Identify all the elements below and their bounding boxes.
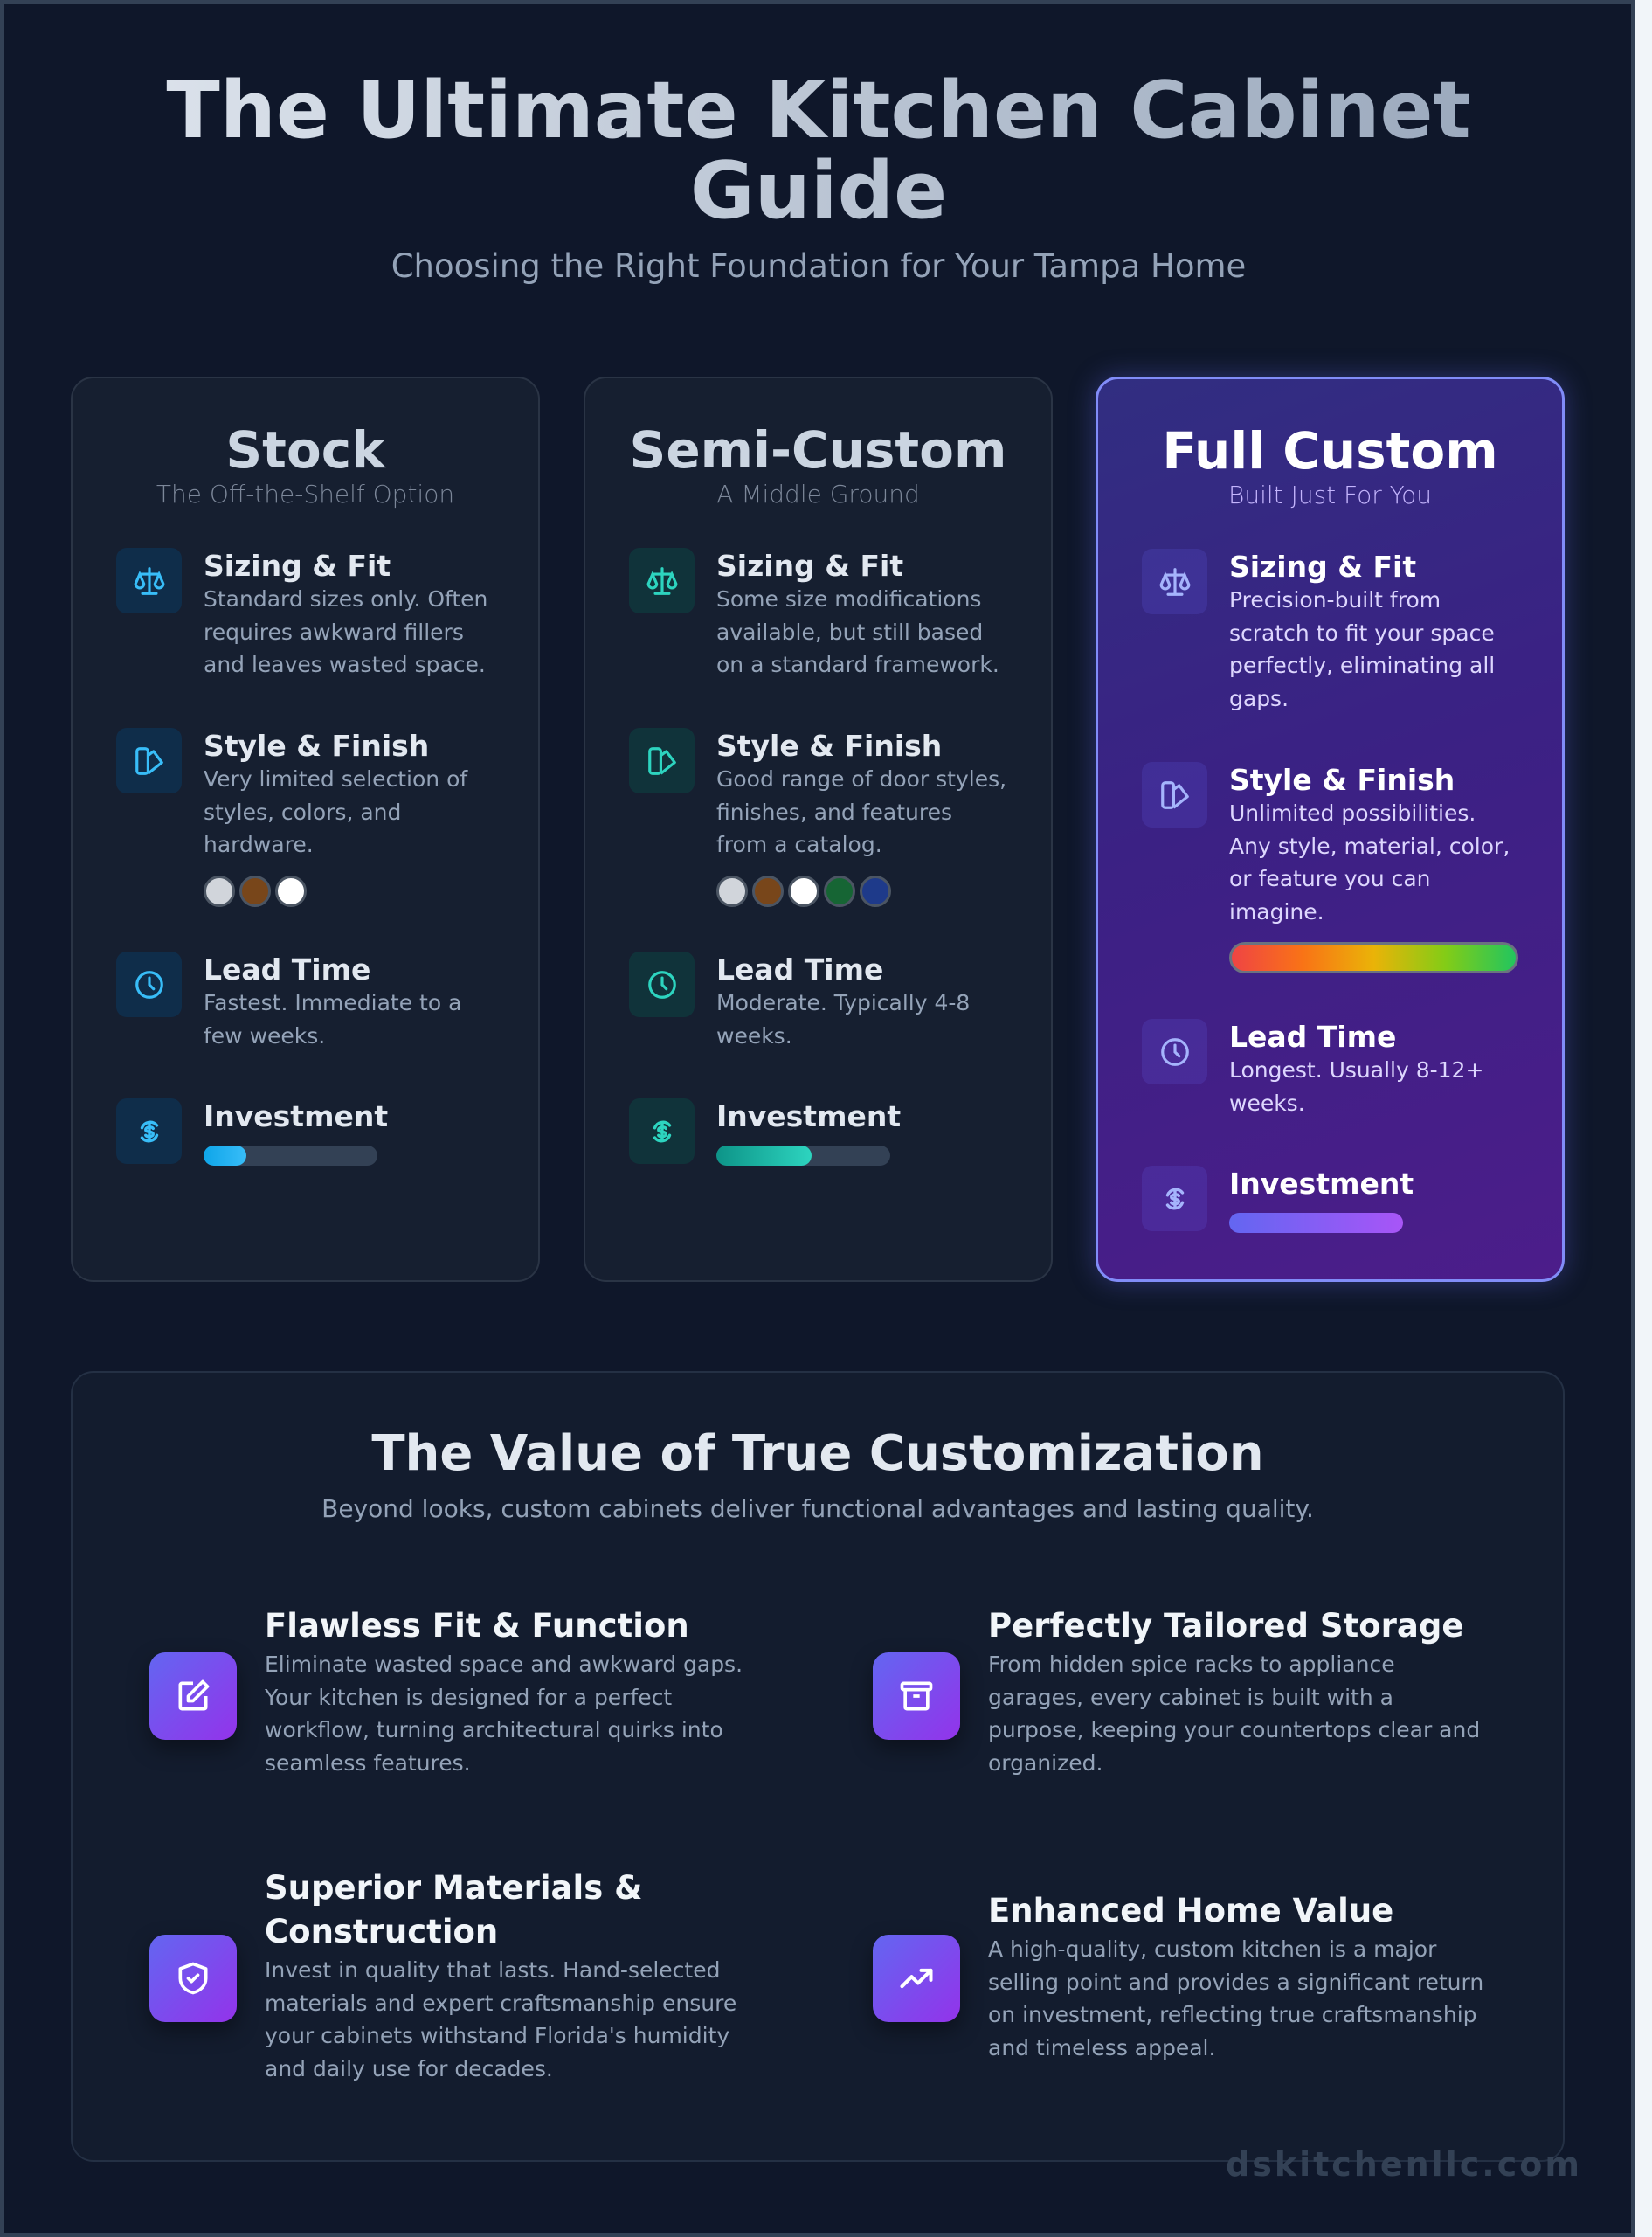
panel: semi-custom: Moderate. Typically 4-8 weeks.: [716, 990, 970, 1049]
item: sizing: [116, 548, 487, 677]
feature: storage: Perfectly Tailored Storage: [988, 1607, 1463, 1645]
panel: full custom: Longest. Usually 8-12+ weeks.: [1229, 1057, 1483, 1115]
panel: semi-custom: Sizing & Fit: [716, 549, 903, 583]
feature: flawless fit: [148, 1607, 743, 1776]
feature: flawless fit: Eliminate wasted space and awkward gaps. Your kitchen is designed for a perfect workflow, turning architectural quirks into seamless features.: [265, 1652, 743, 1776]
panel: full custom: Precision-built from scratch to fit your space perfectly, eliminating all gaps.: [1229, 587, 1495, 711]
title: [1, 71, 1636, 232]
panel: stock: Style & Finish: [204, 729, 429, 763]
panel: semi-custom: Good range of door styles, finishes, and features from a catalog.: [716, 766, 1006, 857]
panel: semi-custom: [584, 377, 1053, 1282]
panel: stock: Lead Time: [204, 952, 370, 987]
panel: stock: [71, 377, 540, 1282]
panel: stock: Fastest. Immediate to a few weeks.: [204, 990, 461, 1049]
item: investment: [116, 1098, 388, 1166]
feature: home value: Enhanced Home Value: [988, 1892, 1393, 1929]
card title: semi: Semi-Custom: [630, 420, 1006, 480]
feature: materials: Invest in quality that lasts. Hand-selected materials and expert craftsmanship ensure your cabinets withstand Florida's humidity and daily use for decades.: [265, 1957, 736, 2081]
panel: full custom: Sizing & Fit: [1229, 550, 1416, 584]
panel: stock: Investment: [204, 1099, 388, 1133]
icon: pencil: [149, 1652, 237, 1740]
icon: shield: [149, 1935, 237, 2022]
feature: materials: Superior Materials & Construction: [265, 1869, 642, 1950]
panel: semi-custom: Lead Time: [716, 952, 883, 987]
panel: stock: Sizing & Fit: [204, 549, 391, 583]
feature: storage: From hidden spice racks to appliance garages, every cabinet is built with a purpose, keeping your countertops clear and organized.: [988, 1652, 1480, 1776]
feature: home value: A high-quality, custom kitchen is a major selling point and provides a significant return on investment, reflecting true craftsmanship and timeless appeal.: [988, 1936, 1483, 2060]
card subtitle: The Off-the-Shelf Option: [156, 480, 454, 509]
section subtitle: Beyond looks, custom cabinets deliver functional advantages and lasting quality.: [321, 1494, 1314, 1523]
icon: archive: [873, 1652, 960, 1740]
panel: full custom: Investment: [1229, 1167, 1414, 1201]
item: investment: [1142, 1166, 1414, 1233]
item: style: [1142, 762, 1518, 973]
panel: semi-custom: Style & Finish: [716, 729, 942, 763]
feature: materials: [148, 1869, 736, 2081]
panel: value of customization: [71, 1371, 1565, 2162]
item: style: [629, 728, 1006, 907]
item: lead time: [116, 952, 461, 1049]
feature: flawless fit: Flawless Fit & Function: [265, 1607, 689, 1645]
item: lead time: [1142, 1019, 1483, 1115]
panel: full custom: Lead Time: [1229, 1020, 1396, 1054]
feature: home value: [871, 1892, 1483, 2060]
watermark: dskitchenllc.com: [1226, 2145, 1582, 2184]
panel: semi-custom: Investment: [716, 1099, 901, 1133]
panel: stock: Very limited selection of styles, colors, and hardware.: [204, 766, 467, 857]
panel: full custom: Unlimited possibilities. Any style, material, color, or feature you can imagine.: [1229, 800, 1510, 925]
card subtitle: A Middle Ground: [716, 480, 920, 509]
feature: storage: [871, 1607, 1480, 1776]
item: sizing: [629, 548, 999, 677]
card title: stock: Stock: [225, 420, 385, 480]
panel: full custom: [1096, 377, 1565, 1282]
section heading: The Value of True Customization: [371, 1425, 1264, 1482]
card title: full: Full Custom: [1162, 421, 1498, 481]
item: style: [116, 728, 468, 907]
item: lead time: [629, 952, 970, 1049]
item: sizing: [1142, 549, 1495, 711]
title: Guide: [690, 145, 947, 237]
panel: stock: Standard sizes only. Often requires awkward fillers and leaves wasted space.: [204, 586, 487, 677]
subtitle: Choosing the Right Foundation for Your Tampa Home: [391, 247, 1246, 285]
panel: full custom: Style & Finish: [1229, 763, 1455, 797]
card subtitle: Built Just For You: [1228, 481, 1432, 509]
panel: semi-custom: Some size modifications available, but still based on a standard framework.: [716, 586, 999, 677]
title: The Ultimate Kitchen Cabinet: [166, 65, 1471, 156]
item: investment: [629, 1098, 901, 1166]
icon: trending up: [873, 1935, 960, 2022]
